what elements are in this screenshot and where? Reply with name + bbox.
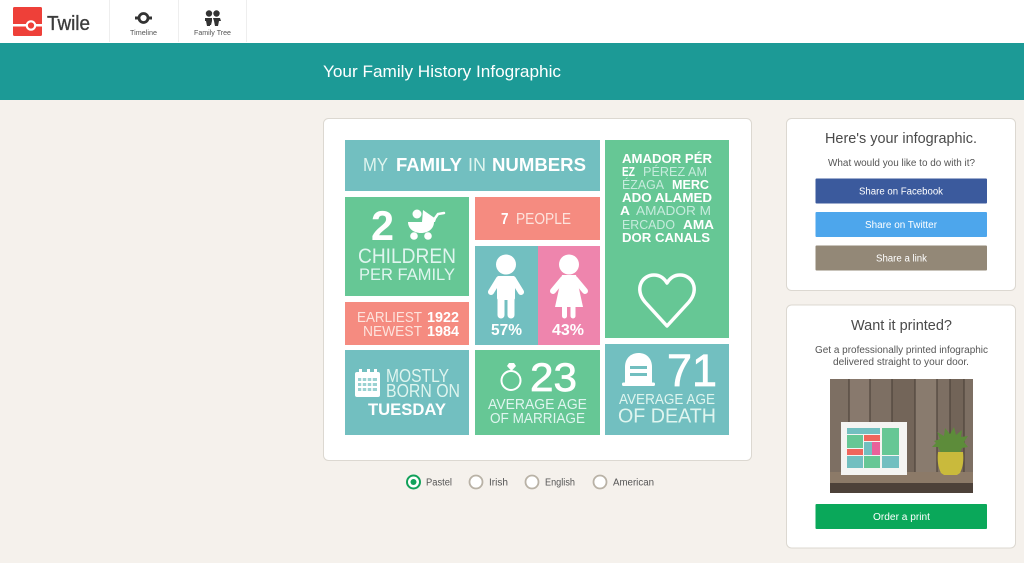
family names text: AMA	[683, 217, 715, 232]
panel: order a print	[786, 305, 1016, 548]
tile: family names and heart	[605, 140, 729, 338]
icon: girl	[553, 254, 585, 316]
tile: female share: 43%	[552, 322, 584, 339]
family names text	[620, 151, 715, 245]
panel: infographic card	[324, 118, 752, 460]
family names text: MERC	[672, 177, 710, 192]
tile: earliest and newest: NEWEST	[363, 323, 422, 340]
potted plant	[932, 427, 968, 475]
tile: female share	[538, 246, 600, 345]
radio: Irish	[470, 476, 508, 488]
radio: American: American	[613, 478, 654, 488]
radio: Irish: Irish	[489, 478, 508, 488]
tile: average age of death: AVERAGE AGE	[619, 392, 715, 408]
tile: average age of death: 71	[667, 345, 717, 396]
button: Share on Twitter: Share on Twitter	[865, 220, 938, 231]
print description: delivered straight to your door.	[833, 357, 969, 368]
framed mini infographic	[841, 422, 907, 475]
tile: 7 people	[475, 197, 600, 240]
tile: male share	[475, 246, 538, 345]
family names text: ÉZAGA	[622, 177, 664, 192]
print heading: Want it printed?	[851, 317, 952, 334]
icon: ring	[502, 363, 520, 390]
button: Share on Facebook	[816, 178, 987, 204]
nav item: Family Tree: Family Tree	[194, 28, 231, 37]
radio: Pastel: Pastel	[426, 478, 452, 488]
family names text: EZ	[622, 164, 635, 179]
product photo: framed print on shelf	[830, 379, 973, 493]
button: Share a link	[816, 246, 987, 270]
tile: children per family: CHILDREN	[358, 245, 456, 268]
tile: earliest and newest: 1984	[427, 323, 460, 340]
icon: stroller	[408, 210, 444, 240]
radio: Pastel	[407, 476, 452, 488]
family names text: ERCADO	[622, 217, 675, 232]
family names text: ADO ALAMED	[622, 190, 712, 205]
tile: mostly born on Tuesday: TUESDAY	[368, 400, 447, 419]
button: Order a print	[816, 504, 987, 529]
tile: title: NUMBERS	[492, 155, 586, 175]
family names text: A	[620, 203, 631, 218]
tile: title: MY	[363, 155, 388, 175]
nav item: Timeline: Timeline	[130, 28, 157, 37]
radio: English: English	[545, 478, 575, 488]
tile: title	[345, 140, 600, 191]
radio: English	[526, 476, 575, 488]
page heading: Your Family History Infographic	[323, 63, 561, 81]
tile: 7 people: PEOPLE	[516, 211, 571, 228]
tile: mostly born on Tuesday: BORN ON	[386, 381, 460, 401]
icon: calendar	[355, 369, 380, 397]
theme selector radios	[407, 476, 654, 488]
tile: children per family: PER FAMILY	[359, 265, 455, 284]
tile: average age of death: OF DEATH	[618, 406, 716, 428]
tile: male share: 57%	[491, 322, 522, 339]
button: Share on Twitter	[816, 212, 987, 237]
tile: earliest and newest: 1922	[427, 309, 459, 326]
top navigation bar	[0, 0, 1024, 43]
icon: heart	[640, 275, 694, 326]
tile: title: IN	[468, 155, 486, 175]
tile: average age of marriage: 23	[530, 356, 577, 400]
share heading: Here's your infographic.	[825, 130, 977, 147]
share prompt: What would you like to do with it?	[828, 158, 975, 169]
tile: mostly born on Tuesday	[345, 350, 469, 435]
tile: children per family	[345, 197, 469, 296]
tile: average age of death	[605, 344, 729, 435]
family names text: AMADOR PÉR	[622, 151, 713, 166]
button: Share a link: Share a link	[876, 254, 928, 264]
tile: title: FAMILY	[396, 155, 462, 175]
button: Share on Facebook: Share on Facebook	[859, 186, 944, 198]
logo wordmark: Twile	[47, 13, 90, 35]
tile: earliest and newest: EARLIEST	[357, 309, 422, 326]
nav item: Timeline	[130, 14, 157, 37]
tile: average age of marriage	[475, 350, 600, 435]
tile: 7 people: 7	[501, 211, 509, 228]
tile: children per family: 2	[371, 202, 394, 249]
teal title banner	[0, 43, 1024, 100]
print description	[815, 345, 988, 368]
icon: Twile logo	[13, 7, 42, 36]
tile: average age of marriage: AVERAGE AGE	[488, 397, 587, 413]
tile: mostly born on Tuesday: MOSTLY	[386, 366, 449, 386]
radio: American	[594, 476, 654, 488]
family names text: PÉREZ AM	[643, 164, 707, 179]
button: Order a print: Order a print	[873, 512, 930, 523]
tile: earliest and newest	[345, 302, 469, 345]
icon: boy	[491, 254, 521, 315]
print description: Get a professionally printed infographic	[815, 345, 988, 356]
icon: gravestone	[622, 353, 655, 386]
family names text: AMADOR M	[636, 203, 711, 218]
tile: average age of marriage: OF MARRIAGE	[490, 411, 585, 427]
panel: share options	[786, 118, 1016, 290]
nav item: Family Tree	[194, 10, 231, 37]
family names text: DOR CANALS	[622, 230, 710, 245]
